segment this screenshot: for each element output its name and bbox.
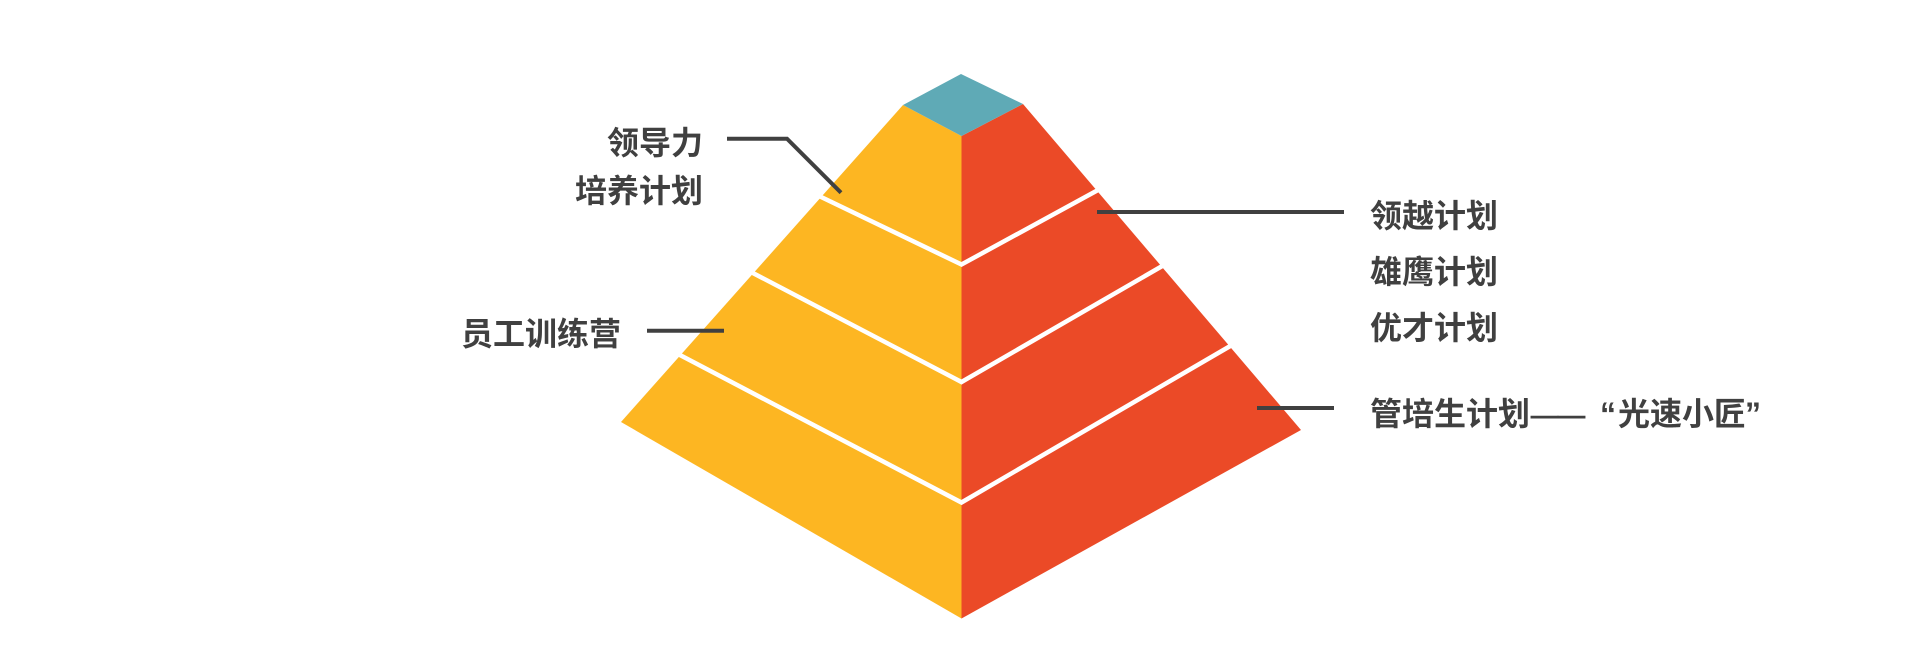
tier divider 1 <box>818 190 1099 264</box>
pyramid <box>621 74 1301 618</box>
leader line: leadership program <box>727 139 841 193</box>
tier divider 2 <box>750 265 1164 382</box>
label: leadership program: 领导力 <box>607 125 703 161</box>
leader line: training camp <box>647 329 724 333</box>
label: management trainee program: 光速小匠 <box>1618 396 1746 432</box>
pyramid right face <box>962 104 1301 618</box>
label: management trainee program: “ <box>1600 396 1616 432</box>
label: management trainee program: 管培生计划 <box>1370 396 1530 432</box>
pyramid top cap <box>903 74 1023 136</box>
label: middle tier programs: 雄鹰计划 <box>1370 254 1498 290</box>
tier divider 3 <box>678 345 1232 502</box>
label: middle tier programs <box>1370 198 1498 346</box>
label: management trainee program: —— <box>1531 400 1585 430</box>
label: leadership program: 培养计划 <box>575 173 703 209</box>
pyramid left face <box>621 105 962 618</box>
label: middle tier programs: 领越计划 <box>1370 198 1498 234</box>
leader line: management trainee <box>1257 406 1334 410</box>
label: management trainee program: ” <box>1745 396 1761 432</box>
label: employee training camp: 员工训练营 <box>461 316 621 352</box>
label: middle tier programs: 优才计划 <box>1370 310 1498 346</box>
leader line: middle tier programs <box>1097 210 1344 214</box>
label: leadership program <box>575 125 703 209</box>
